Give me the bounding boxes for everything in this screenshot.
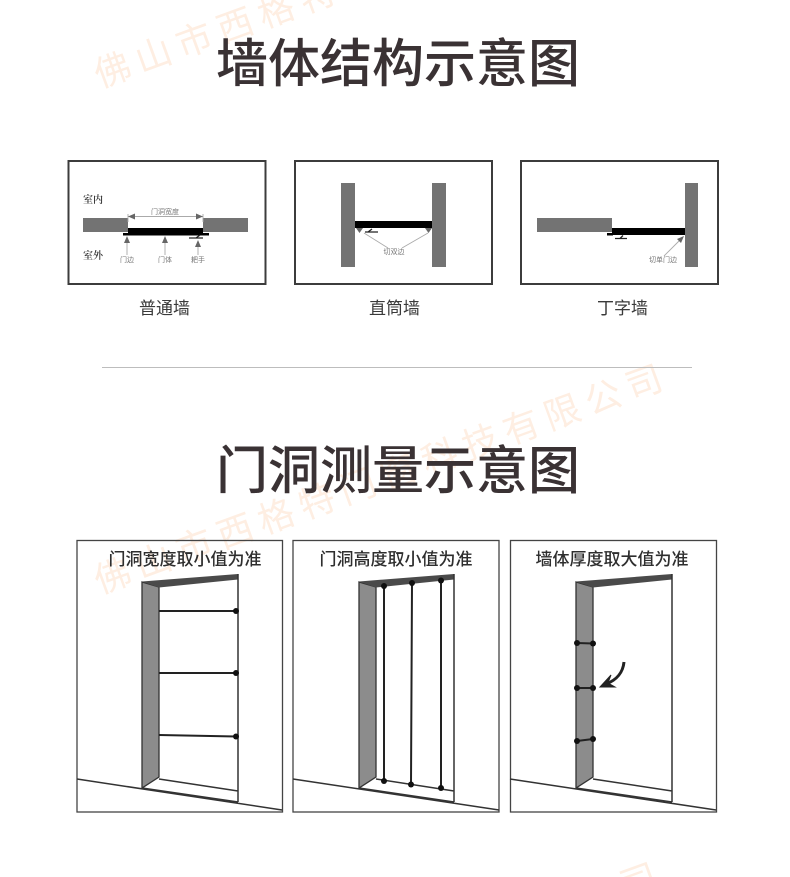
caption: ordinary wall: 普通墙 [139,299,190,318]
pointer arrows [356,228,432,248]
measurement lines [574,640,596,744]
floor line [293,779,499,810]
floor line [510,779,716,810]
single edge label: 切单门边 [649,255,677,264]
watermark: middle line: 佛山市西格特门窗科技有限公司 [89,355,675,602]
heading: 门洞宽度取小值为准 [108,549,262,569]
walls [83,218,248,232]
floor line [77,779,282,810]
pointer arrows [124,236,201,255]
section divider [102,366,692,368]
outdoor label: 室外 [83,249,104,262]
door opening [359,574,454,802]
caption: straight wall: 直筒墙 [369,299,420,318]
handle [189,235,203,238]
panel: T-shaped wall [521,161,718,284]
door leaf [355,221,432,228]
title: wall structure: 墙体结构示意图 [216,36,580,94]
panel: ordinary wall [68,161,266,284]
width dimension label: 门洞宽度 [151,207,179,216]
measurement lines [381,578,444,791]
measurement lines [159,608,239,740]
door leaf [607,228,685,236]
indoor label: 室内 [83,193,103,206]
door opening [576,574,672,802]
handle [365,229,378,232]
panel: thickness measurement [510,540,716,812]
pointer arrow [664,236,684,256]
walls [341,183,446,267]
double edge label: 切双边 [384,247,404,256]
door edge label: 门边 [120,255,134,264]
handle label: 耙手 [191,255,205,264]
door opening [142,574,238,802]
walls [537,183,698,267]
title: door opening measurement: 门洞测量示意图 [216,443,580,501]
icon: curved arrow [600,662,624,687]
heading: 门洞高度取小值为准 [320,550,472,569]
panel: height measurement [293,540,499,812]
panel: width measurement [77,540,282,812]
door leaf [123,228,209,236]
door body label: 门体 [158,255,172,264]
caption: T-shaped wall: 丁字墙 [597,299,648,318]
width dimension arrow [128,214,203,222]
heading: 墙体厚度取大值为准 [536,550,688,569]
panel: straight wall [295,161,492,284]
handle [615,236,627,238]
